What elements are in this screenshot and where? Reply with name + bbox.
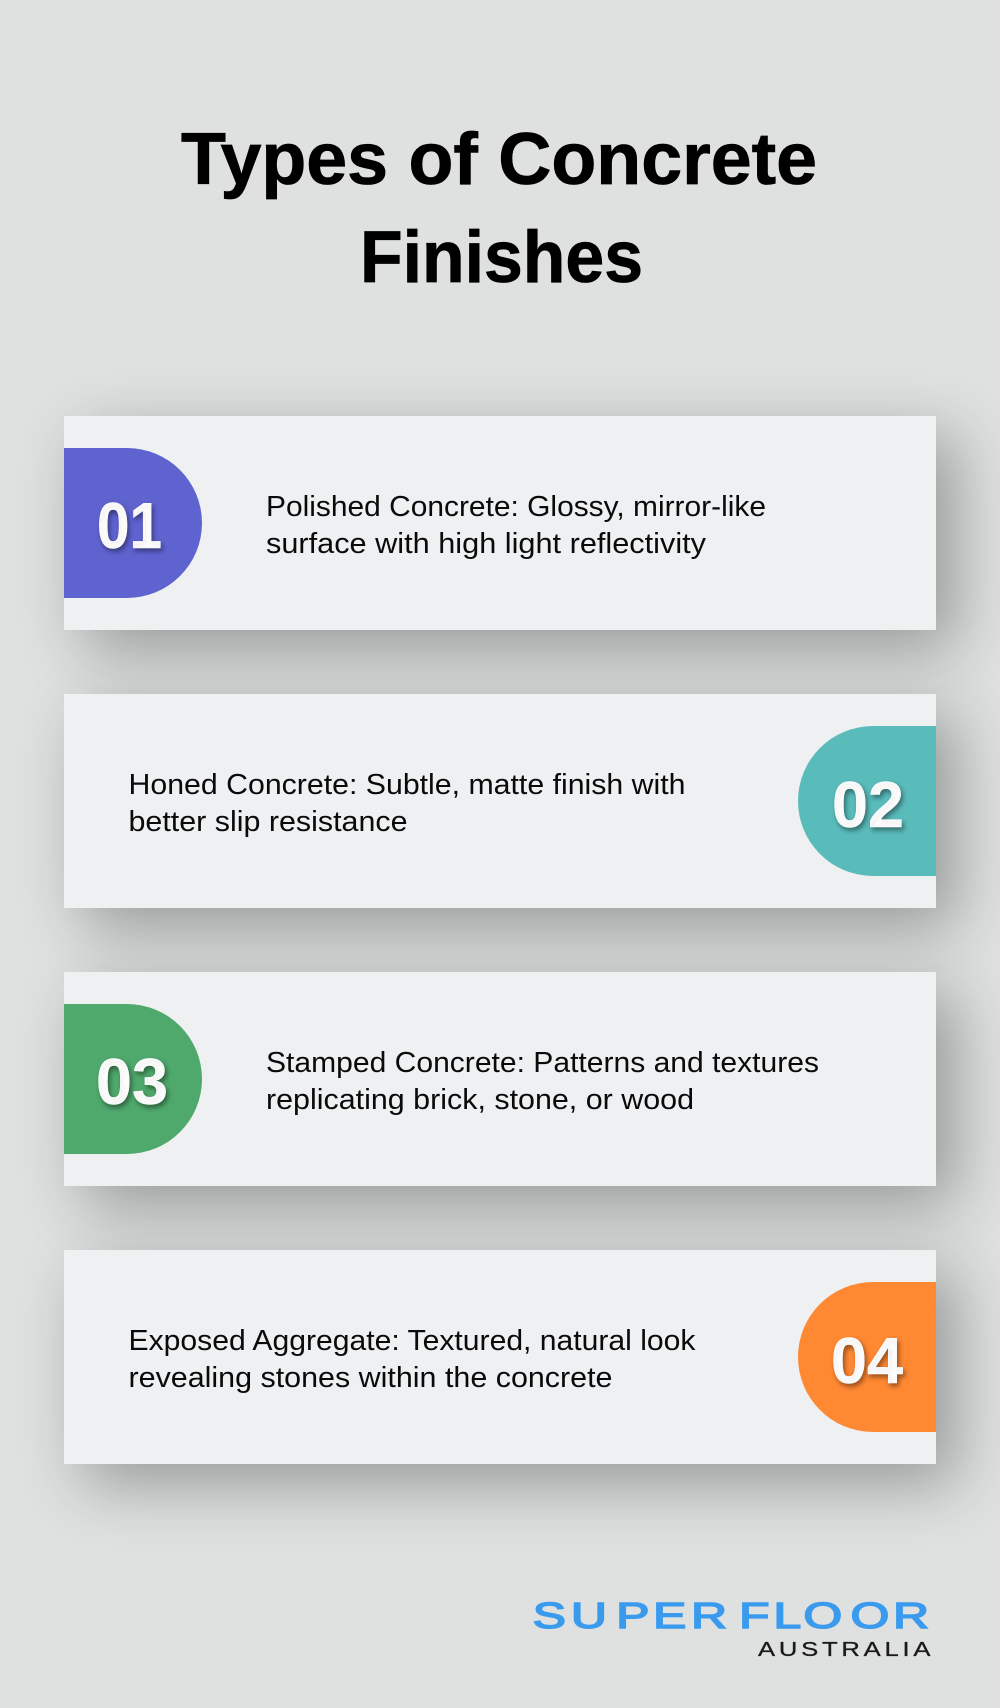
logo: Superfloor Australia: SUPERFLOOR (533, 1597, 929, 1636)
badge 01: 01 (97, 489, 162, 562)
panel: honed concrete (64, 694, 936, 908)
text: honed concrete: Honed Concrete: Subtle, matte finish with (128, 769, 686, 801)
title: Types of Concrete (181, 119, 817, 200)
logo: Superfloor Australia: AUSTRALIA (758, 1637, 931, 1660)
text: exposed aggregate: Exposed Aggregate: Textured, natural look (128, 1325, 696, 1357)
badge 02: 02 (832, 768, 904, 841)
badge 03 (64, 1004, 202, 1154)
panel: exposed aggregate (64, 1250, 936, 1464)
panel: stamped concrete (64, 972, 936, 1186)
text: polished concrete: surface with high light reflectivity (266, 528, 707, 560)
text: honed concrete (128, 769, 686, 838)
title: Finishes (360, 217, 643, 298)
text: honed concrete: better slip resistance (128, 806, 408, 838)
badge 04 (798, 1282, 936, 1432)
badge 03: 03 (96, 1045, 168, 1118)
title (181, 119, 817, 298)
text: exposed aggregate (128, 1325, 696, 1394)
panel: polished concrete (64, 416, 936, 630)
text: polished concrete: Polished Concrete: Glossy, mirror-like (266, 491, 766, 523)
badge 04: 04 (831, 1324, 903, 1397)
text: stamped concrete (266, 1047, 819, 1116)
text: stamped concrete: Stamped Concrete: Patterns and textures (266, 1047, 819, 1079)
text: stamped concrete: replicating brick, stone, or wood (266, 1084, 694, 1116)
badge 01 (64, 448, 202, 598)
text: polished concrete (266, 491, 766, 560)
text: exposed aggregate: revealing stones within the concrete (128, 1362, 612, 1394)
badge 02 (798, 726, 936, 876)
